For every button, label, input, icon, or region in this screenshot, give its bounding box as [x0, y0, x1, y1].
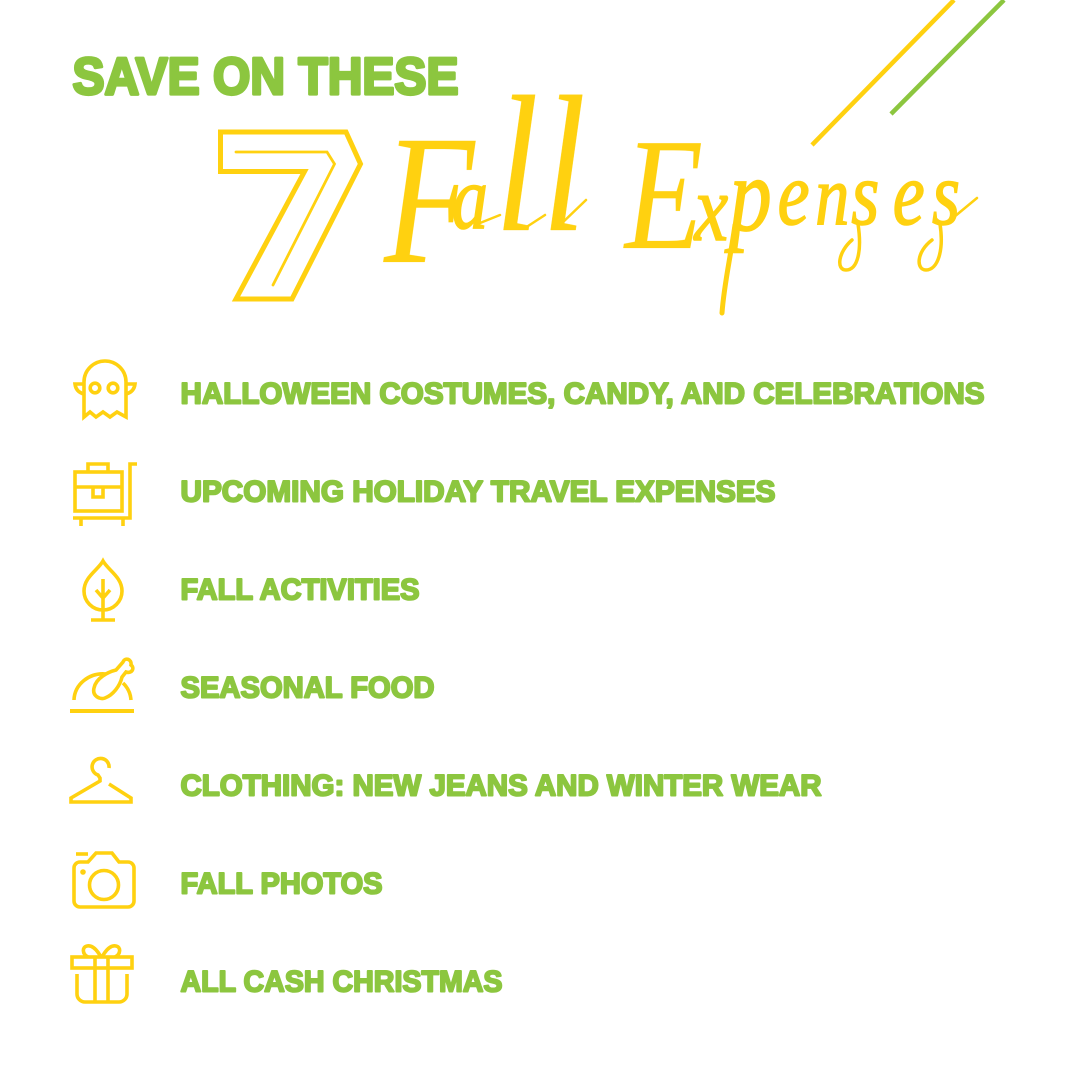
script title: fall expenses: F: [383, 99, 476, 303]
icon: camera: [74, 853, 134, 907]
label: CLOTHING: NEW JEANS AND WINTER WEAR: [180, 770, 822, 802]
script title: fall expenses: n: [815, 148, 849, 243]
script title: fall expenses: x: [693, 155, 728, 261]
script title: fall expenses: l: [542, 58, 586, 273]
script title: fall expenses: l: [495, 58, 539, 273]
script title: fall expenses: [383, 58, 977, 313]
list item 6: [74, 853, 382, 907]
label: ALL CASH CHRISTMAS: [180, 966, 502, 998]
list item 2: [73, 464, 776, 526]
icon: hanger: [71, 758, 131, 802]
flourishes: brush tails and loops: [475, 198, 977, 313]
icon: ghost: [75, 361, 135, 417]
list item 3: [84, 561, 420, 620]
list item 5: [71, 758, 822, 802]
title: save on these: SAVE ON THESE: [72, 48, 458, 106]
list item 1: [75, 361, 984, 417]
icon: gift box: [72, 946, 132, 1002]
label: FALL PHOTOS: [180, 868, 382, 900]
icon: roast turkey: [70, 659, 134, 711]
script title: fall expenses: e: [893, 143, 925, 244]
icon: briefcase on cart: [73, 464, 137, 526]
label: HALLOWEEN COSTUMES, CANDY, AND CELEBRATIONS: [180, 378, 984, 410]
label: SEASONAL FOOD: [180, 672, 434, 704]
list item 4: [70, 659, 434, 711]
outlined number 7: [220, 132, 360, 299]
list item 7: [72, 946, 502, 1002]
script title: fall expenses: e: [778, 143, 810, 244]
script title: fall expenses: a: [452, 147, 488, 248]
icon: leaf: [84, 561, 122, 620]
decorative diagonal line: green: [891, 0, 1004, 114]
decorative diagonal line: yellow: [812, 0, 954, 145]
script title: fall expenses: s: [851, 143, 879, 244]
script title: fall expenses: p: [724, 136, 772, 253]
label: FALL ACTIVITIES: [180, 574, 420, 606]
label: UPCOMING HOLIDAY TRAVEL EXPENSES: [180, 476, 776, 508]
script title: fall expenses: E: [623, 107, 703, 283]
script title: fall expenses: s: [932, 143, 960, 244]
